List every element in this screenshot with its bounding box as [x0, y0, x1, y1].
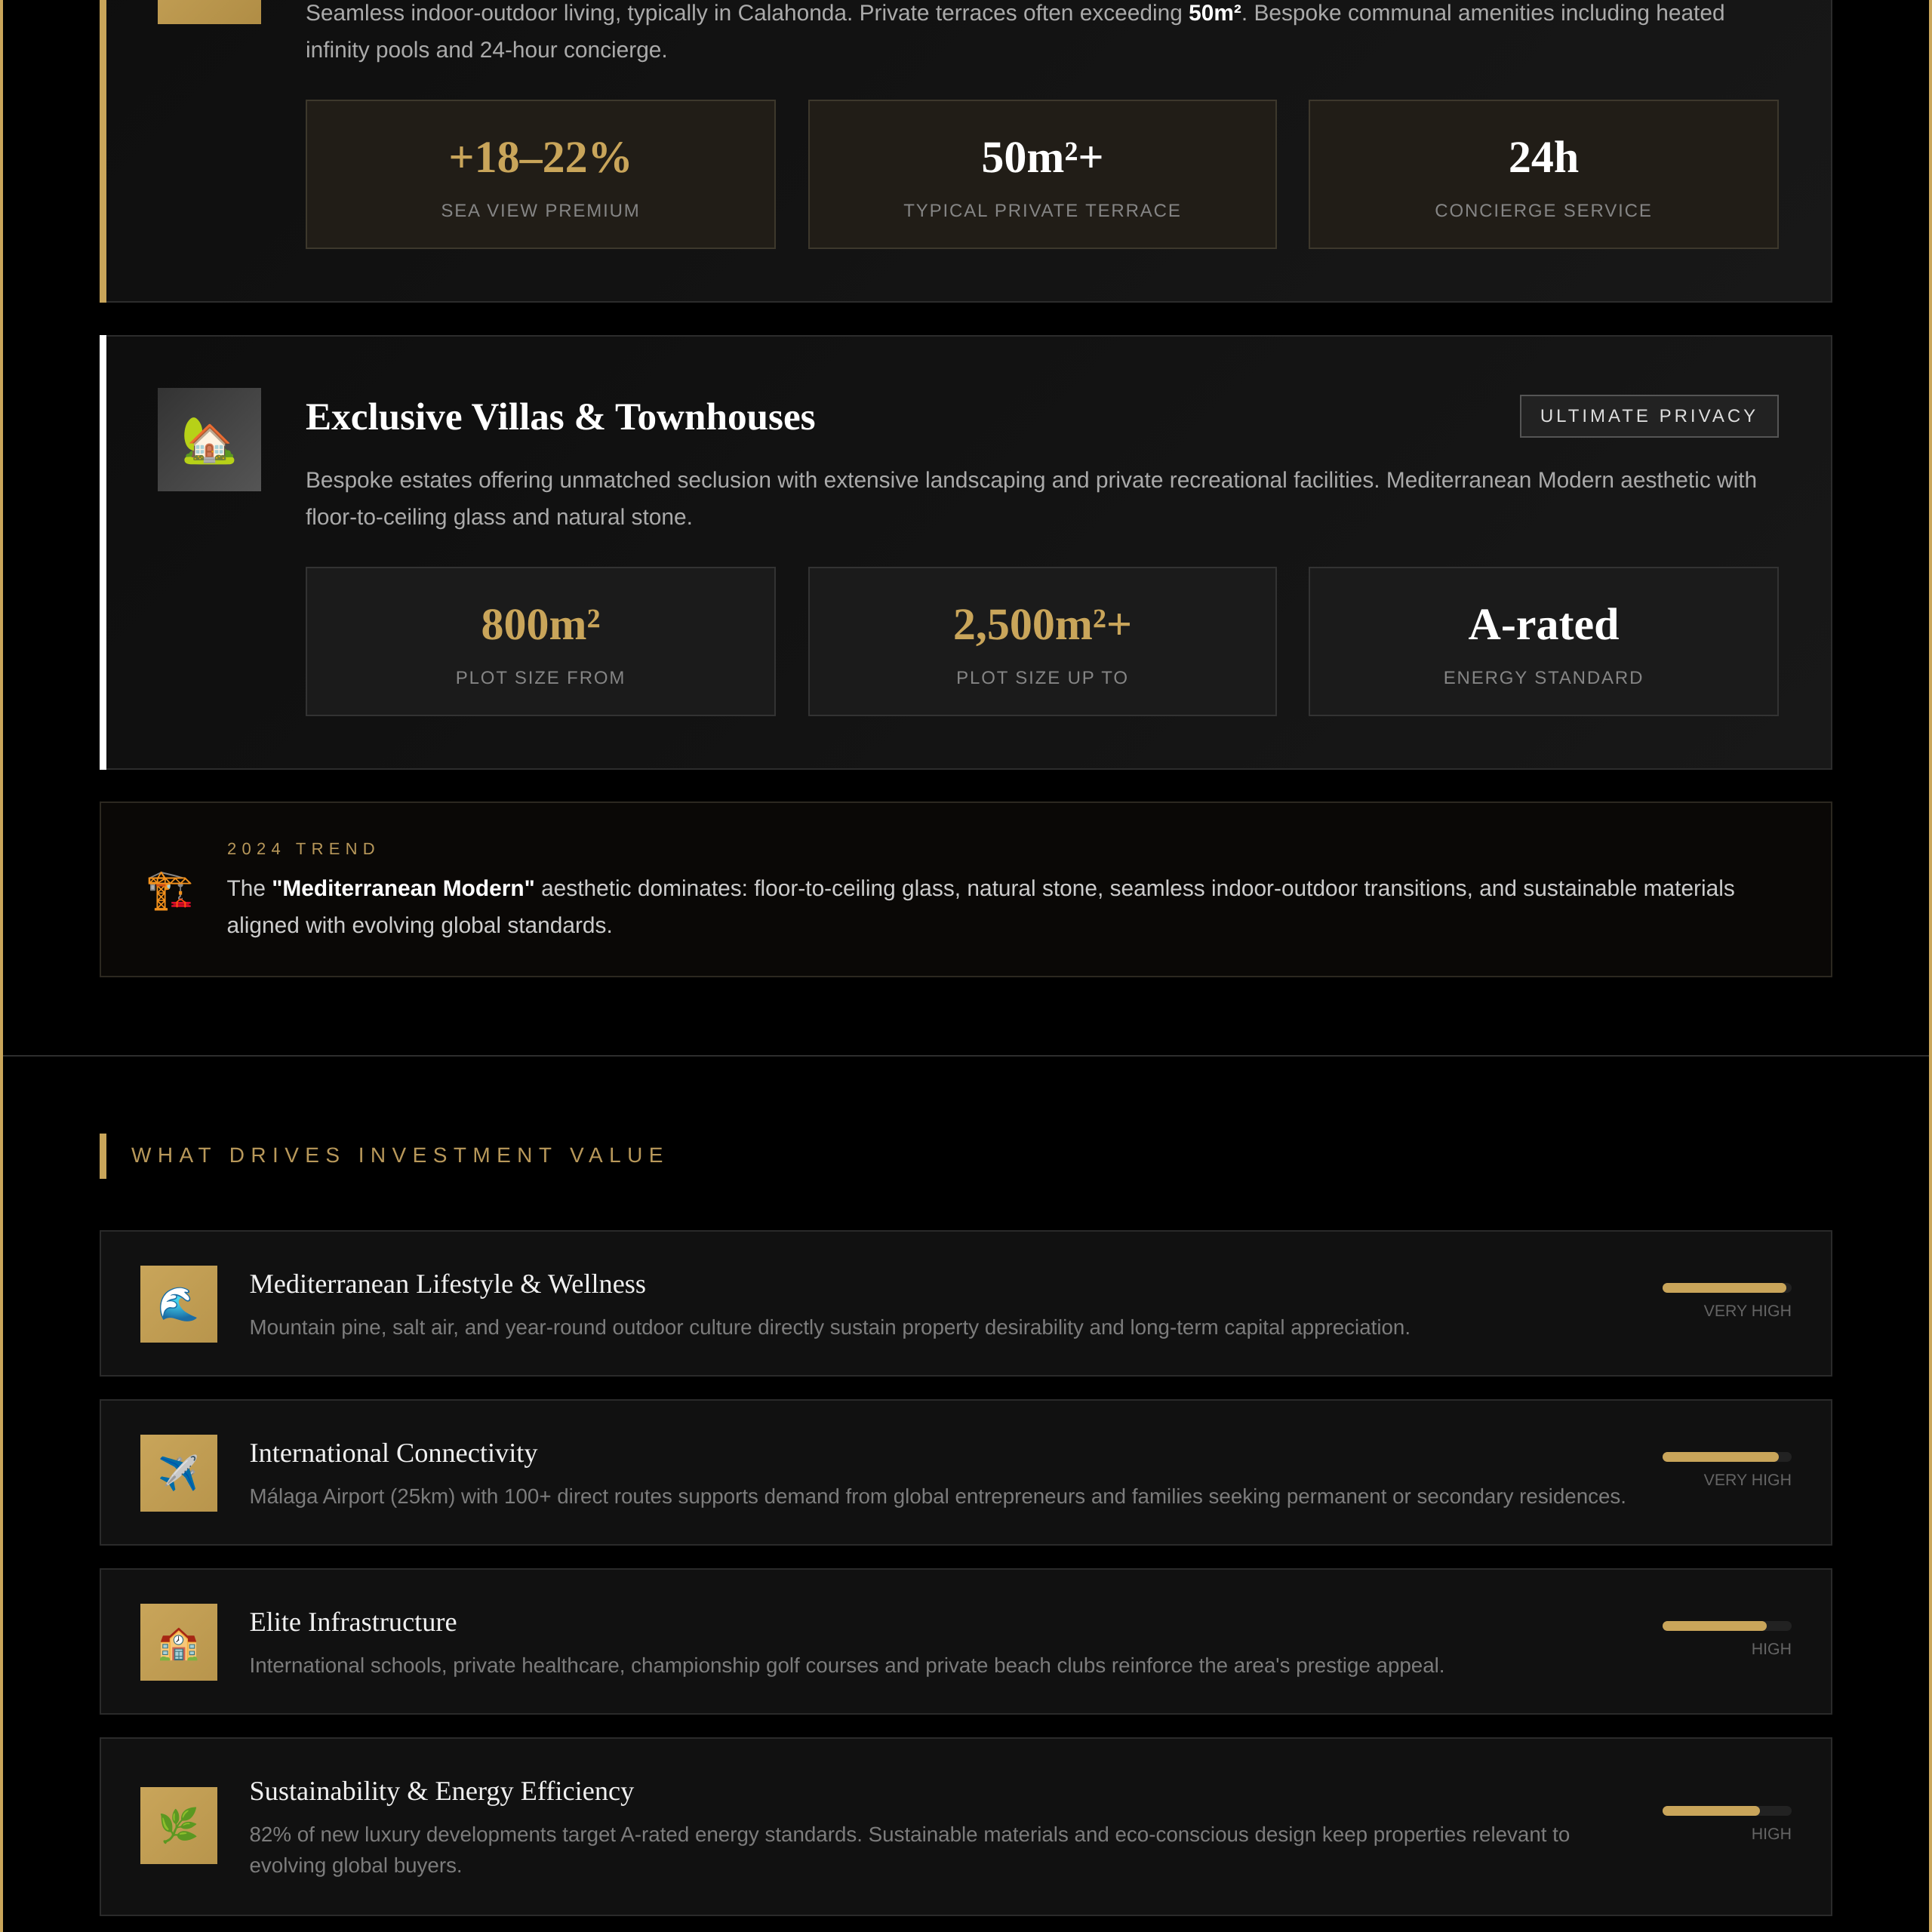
icon: herb: [140, 1787, 217, 1864]
driver title: International Connectivity: [249, 1437, 538, 1467]
stat: plot from: 800m²: [481, 599, 600, 649]
trend text: The "Mediterranean Modern" aesthetic dominates: floor-to-ceiling glass, natural stone, seamless indoor-outdoor transitions, and sustainable materials: [226, 876, 1735, 901]
stat: plot up to: 2,500m²+: [953, 599, 1132, 649]
driver description: 82% of new luxury developments target A-rated energy standards. Sustainable materials and eco-conscious design keep properties relevant to: [249, 1823, 1570, 1846]
value driver: infrastructure: [100, 1568, 1832, 1715]
driver title: Sustainability & Energy Efficiency: [249, 1775, 634, 1805]
impact bar: [1663, 1806, 1792, 1816]
stat: private terrace: 50m²+: [981, 132, 1104, 182]
icon: wave: [140, 1266, 217, 1343]
impact bar: [1663, 1621, 1792, 1631]
icon: crane: 🏗️: [146, 868, 194, 912]
stat: energy standard: A-rated: [1469, 599, 1619, 649]
panel: exclusive villas card: [100, 335, 1832, 770]
impact label: VERY HIGH: [1704, 1471, 1792, 1489]
trend text: aligned with evolving global standards.: [226, 913, 613, 938]
stat: energy standard: ENERGY STANDARD: [1444, 668, 1644, 688]
stat: plot up to: PLOT SIZE UP TO: [956, 668, 1129, 688]
description: floor-to-ceiling glass and natural stone.: [306, 505, 693, 530]
description: Bespoke estates offering unmatched seclusion with extensive landscaping and private recreational facilities. Mediterranean Modern aesthetic with: [306, 468, 1757, 493]
stat: concierge: CONCIERGE SERVICE: [1435, 201, 1653, 221]
icon: house with garden: 🏡: [181, 412, 238, 466]
icon: airplane: [140, 1435, 217, 1512]
driver description: International schools, private healthcare, championship golf courses and private beach clubs reinforce the area's prestige appeal.: [249, 1654, 1445, 1677]
driver title: Mediterranean Lifestyle & Wellness: [249, 1268, 646, 1298]
stat: private terrace: [808, 100, 1277, 249]
value driver: sustainability: [100, 1737, 1832, 1916]
impact label: HIGH: [1752, 1640, 1792, 1658]
impact bar: [1663, 1452, 1792, 1462]
trend label: 2024 TREND: [227, 839, 380, 858]
stat: concierge: [1309, 100, 1779, 249]
impact bar: [1663, 1283, 1792, 1293]
impact label: VERY HIGH: [1704, 1302, 1792, 1320]
driver description: [249, 1823, 1570, 1877]
icon: house with garden: [158, 388, 261, 491]
white accent bar: [100, 335, 106, 770]
stat: sea view premium: [306, 100, 776, 249]
icon tile (cropped): [158, 0, 261, 24]
gold accent bar: [100, 0, 106, 303]
value driver: lifestyle: [100, 1230, 1832, 1377]
panel: luxury apartments card (cropped): [100, 0, 1832, 303]
stat: energy standard: [1309, 567, 1779, 716]
heading accent bar: [100, 1134, 106, 1179]
impact label: HIGH: [1752, 1825, 1792, 1843]
badge: ultimate privacy: [1520, 395, 1779, 438]
driver description: evolving global buyers.: [249, 1854, 463, 1877]
driver description: Mountain pine, salt air, and year-round outdoor culture directly sustain property desirability and long-term capital appreciation.: [249, 1315, 1411, 1339]
left gold page border: [0, 0, 3, 1932]
description: [306, 1, 1725, 63]
icon: school: 🏫: [158, 1623, 199, 1662]
section divider: [3, 1055, 1929, 1057]
description: [306, 468, 1757, 530]
value driver: connectivity: [100, 1399, 1832, 1546]
stat: plot from: [306, 567, 776, 716]
stat: plot from: PLOT SIZE FROM: [456, 668, 626, 688]
description: infinity pools and 24-hour concierge.: [306, 38, 668, 63]
right gold page border: [1929, 0, 1932, 1932]
icon: herb: 🌿: [158, 1806, 199, 1845]
stat: concierge: 24h: [1509, 132, 1579, 182]
stat: private terrace: TYPICAL PRIVATE TERRACE: [903, 201, 1182, 221]
stat: sea view premium: +18–22%: [448, 132, 633, 182]
icon: school: [140, 1604, 217, 1681]
trend text: [226, 876, 1735, 938]
section heading: [100, 1134, 669, 1179]
stat: sea view premium: SEA VIEW PREMIUM: [441, 201, 641, 221]
heading: Exclusive Villas & Townhouses: [306, 395, 816, 438]
driver title: Elite Infrastructure: [249, 1606, 457, 1636]
icon: wave: 🌊: [158, 1284, 199, 1324]
description: Seamless indoor-outdoor living, typically in Calahonda. Private terraces often exceeding 50m². Bespoke communal amenities including heated: [306, 1, 1725, 26]
icon: airplane: ✈️: [158, 1454, 199, 1493]
callout: 2024 trend: [100, 801, 1832, 977]
heading text: WHAT DRIVES INVESTMENT VALUE: [131, 1143, 669, 1167]
badge: ultimate privacy: ULTIMATE PRIVACY: [1540, 406, 1758, 426]
driver description: Málaga Airport (25km) with 100+ direct routes supports demand from global entrepreneurs and families seeking permanent or secondary residences.: [249, 1484, 1626, 1508]
stat: plot up to: [808, 567, 1277, 716]
